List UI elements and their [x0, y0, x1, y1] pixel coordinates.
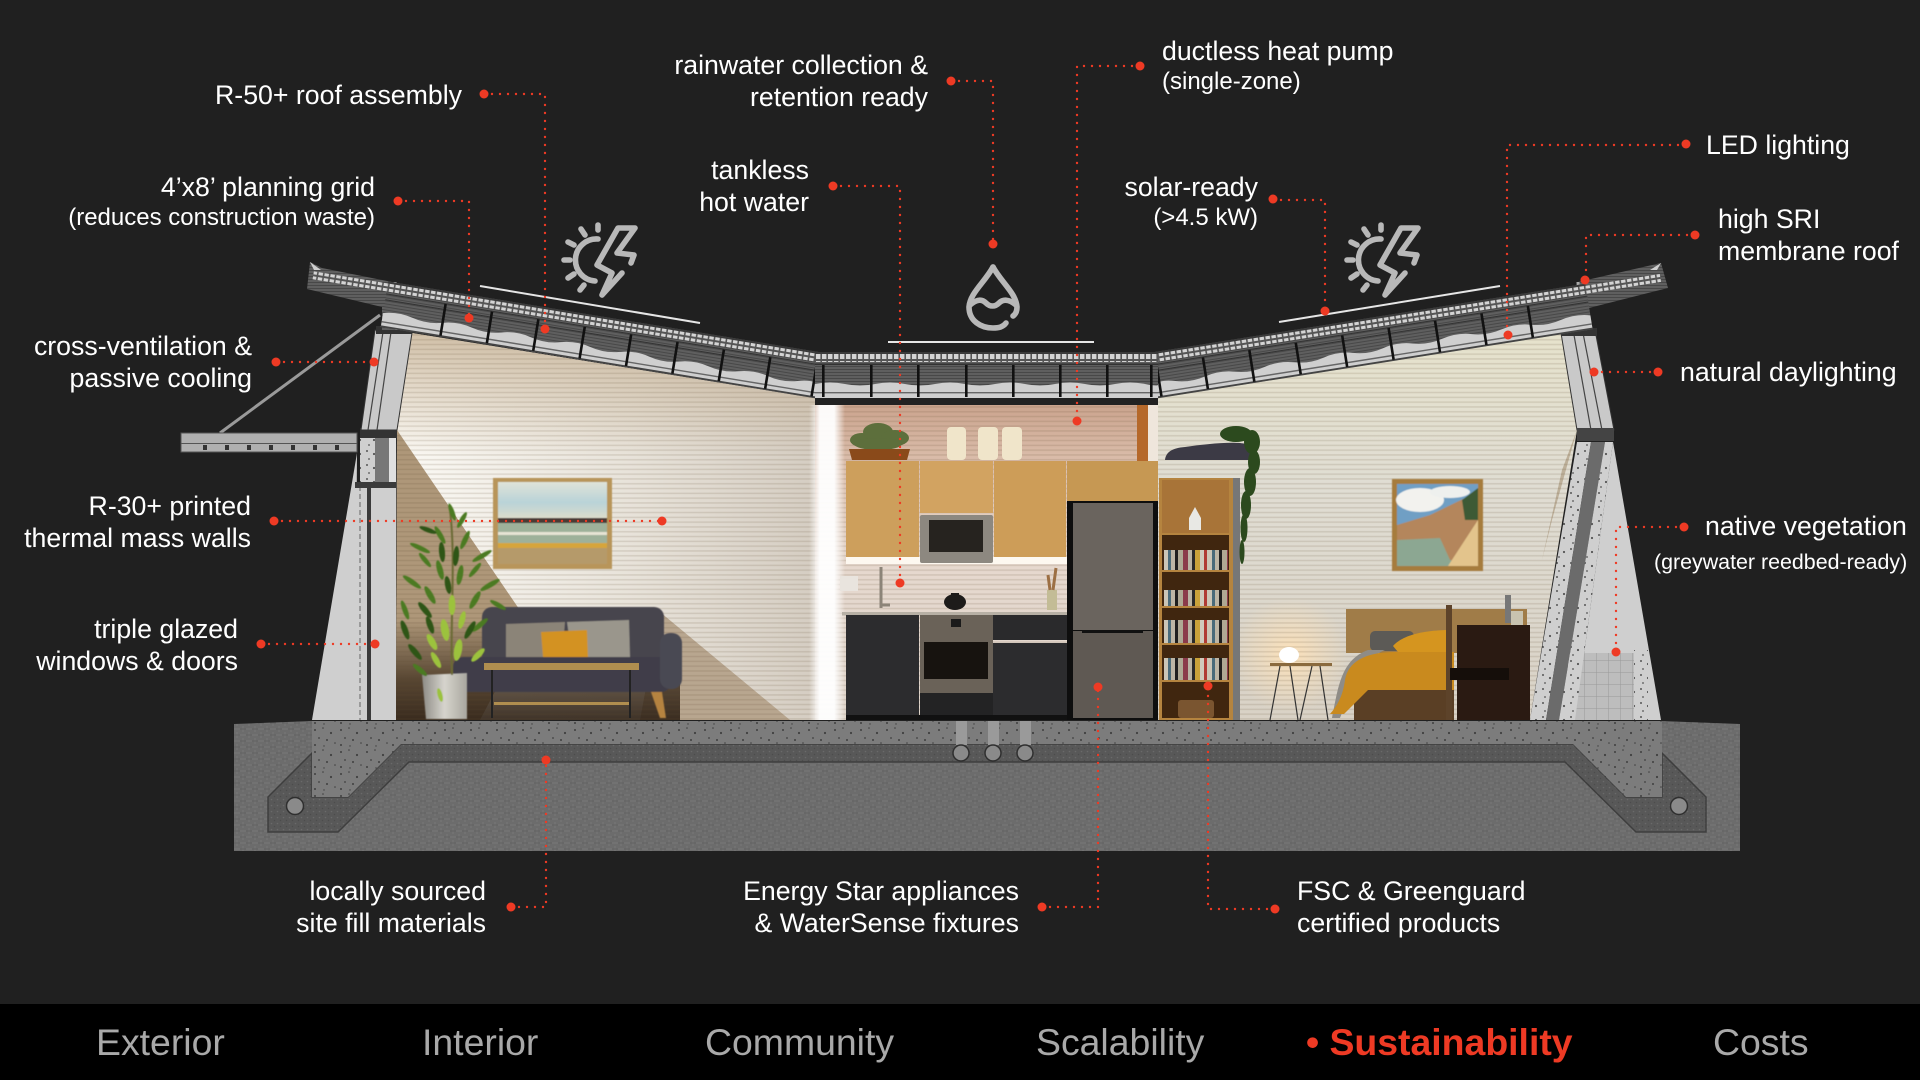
wall shadow wedge	[396, 430, 530, 720]
roof shelf plant	[849, 423, 910, 460]
bright wall sliver	[1148, 405, 1158, 461]
bed base	[1354, 687, 1454, 720]
headboard	[1346, 609, 1527, 653]
drain pipe right	[1670, 798, 1688, 814]
callout: thermal mass walls: thermal mass walls	[24, 523, 251, 553]
drain pipe left	[286, 798, 304, 814]
coffee table	[484, 663, 639, 718]
faucet	[881, 567, 890, 608]
callout: rainwater	[674, 50, 998, 248]
callout: planning grid: 4’x8’ planning grid	[161, 172, 375, 202]
awning shade	[181, 433, 357, 452]
callout: solar-ready: solar-ready	[1124, 172, 1259, 202]
reedbed planter	[1568, 650, 1648, 720]
grey sheet	[1332, 650, 1385, 718]
kettle pot	[944, 593, 966, 610]
left eave	[307, 262, 397, 330]
nav item: Community: Community	[705, 1021, 894, 1063]
left wall	[396, 333, 815, 720]
nav item: Scalability: Scalability	[1036, 1021, 1205, 1063]
callout: triple glazed	[35, 614, 380, 676]
side table and lamp	[1270, 647, 1332, 720]
painting: coast	[1392, 479, 1483, 571]
callout: cross-ventilation: passive cooling	[70, 363, 252, 393]
callout: heat pump: (single-zone)	[1162, 68, 1301, 95]
desk items	[1505, 595, 1523, 625]
right wall	[1158, 333, 1577, 720]
callout: solar-ready: (>4.5 kW)	[1153, 204, 1258, 231]
callout: planning grid: (reduces construction waste)	[68, 204, 375, 231]
lower cabinets	[846, 615, 1068, 720]
awning strut	[220, 315, 380, 433]
bedroom interior	[1158, 333, 1577, 720]
centre ceiling band	[815, 398, 1158, 405]
callout: membrane roof: membrane roof	[1718, 236, 1900, 266]
microwave	[920, 515, 993, 563]
ground fill	[234, 721, 1740, 851]
nav item: Exterior: Exterior	[96, 1021, 225, 1063]
concrete floor and footings	[312, 721, 1662, 797]
desk	[1457, 625, 1530, 720]
right roof panel	[1151, 284, 1593, 398]
under cabinet light	[846, 557, 1068, 564]
sofa	[453, 607, 682, 718]
callout: tankless hot water: tankless	[711, 155, 809, 185]
trailing vines	[1220, 426, 1260, 564]
callout: heat pump: ductless heat pump	[1162, 36, 1393, 66]
site slab and foundation	[234, 721, 1740, 851]
callout: appliances: & WaterSense fixtures	[754, 908, 1019, 938]
callout: thermal mass walls: R-30+ printed	[89, 491, 251, 521]
outlet plate	[840, 576, 858, 591]
glazed door	[355, 482, 396, 720]
callout: planning grid	[68, 172, 474, 322]
clerestory window	[1561, 328, 1614, 441]
callout: tankless hot water	[699, 155, 904, 588]
callout: tankless hot water: hot water	[699, 187, 809, 217]
utensil crock	[1047, 568, 1057, 610]
solar panel line right	[1279, 286, 1500, 322]
jars	[947, 427, 1022, 460]
books	[1164, 550, 1228, 718]
living room interior	[396, 333, 815, 720]
nav item: Interior: Interior	[422, 1021, 538, 1063]
callout: native vegetation	[1612, 511, 1907, 656]
upper cabinets	[846, 461, 1245, 557]
timber post	[1137, 405, 1148, 461]
roof section	[307, 262, 1668, 405]
kitchen	[809, 405, 1245, 720]
printed wall section	[1530, 442, 1613, 720]
wall header	[360, 428, 397, 482]
callout: native vegetation: (greywater reedbed-ready)	[1654, 550, 1907, 574]
left wall assembly	[181, 315, 412, 720]
right eave	[1576, 263, 1668, 330]
lamp glow	[1232, 597, 1348, 713]
callout: membrane roof	[1580, 204, 1900, 284]
callout: native vegetation: native vegetation	[1705, 511, 1907, 541]
callout: certified products: FSC & Greenguard	[1297, 876, 1525, 906]
centre roof panel	[815, 352, 1158, 398]
right wall assembly	[1530, 328, 1661, 720]
nav item: Sustainability active: • Sustainability	[1306, 1021, 1573, 1063]
landscape wedge	[312, 453, 357, 720]
post	[1233, 478, 1240, 720]
callout: triple glazed: triple glazed	[94, 614, 238, 644]
sofa shadow	[640, 612, 790, 720]
wall shadow	[1542, 430, 1577, 560]
callout: LED lighting: LED lighting	[1706, 130, 1850, 160]
planted swale wedge	[1575, 442, 1661, 720]
callout: cross-ventilation: cross-ventilation &	[34, 331, 252, 361]
callout: roof assembly: R-50+ roof assembly	[215, 80, 463, 110]
callout: heat pump	[1072, 36, 1393, 426]
callout: appliances: Energy Star appliances	[743, 876, 1019, 906]
chair	[1446, 605, 1509, 720]
callout: thermal mass walls	[24, 491, 666, 553]
callout: solar-ready	[1124, 172, 1330, 316]
callout: LED lighting	[1504, 130, 1850, 340]
callout: rainwater: rainwater collection &	[674, 50, 928, 80]
left roof panel	[381, 281, 822, 398]
callout: certified products	[1204, 682, 1525, 938]
painting: beach	[493, 478, 612, 569]
icon: water drop	[969, 267, 1017, 328]
navigation bar	[0, 1004, 1920, 1080]
callout: site fill	[296, 756, 550, 938]
oven	[920, 615, 993, 693]
duvet	[1330, 652, 1454, 714]
callout: daylighting: natural daylighting	[1680, 357, 1897, 387]
pillows	[1370, 630, 1450, 652]
callout: membrane roof: high SRI	[1718, 204, 1820, 234]
callout: triple glazed: windows & doors	[35, 646, 238, 676]
callout: cross-ventilation	[34, 331, 378, 393]
nav item: Costs: Costs	[1713, 1021, 1809, 1063]
callout: site fill: locally sourced	[309, 876, 486, 906]
icon: sun and lightning right	[1347, 225, 1418, 295]
refrigerator	[1067, 501, 1158, 720]
bookcase	[1159, 426, 1260, 720]
solar panel line left	[480, 286, 700, 323]
utility pipes	[953, 721, 1033, 761]
kitchen wall	[815, 405, 1158, 720]
callout: site fill: site fill materials	[296, 908, 486, 938]
callout: rainwater: retention ready	[750, 82, 929, 112]
rainwater catch line	[888, 341, 1094, 343]
icon: sun and lightning left	[564, 225, 635, 295]
callout: roof assembly	[215, 80, 550, 334]
potted plant	[399, 503, 507, 719]
operable clerestory window	[361, 326, 412, 430]
callout: certified products: certified products	[1297, 908, 1500, 938]
blanket	[1165, 443, 1252, 460]
ceiling wash	[396, 333, 815, 720]
vase	[1189, 507, 1201, 530]
gravel drainage layer	[268, 744, 1706, 832]
callout: appliances	[743, 682, 1102, 938]
floor level shadow	[396, 620, 680, 720]
countertop	[842, 612, 1072, 616]
glowing pillar	[809, 405, 845, 720]
